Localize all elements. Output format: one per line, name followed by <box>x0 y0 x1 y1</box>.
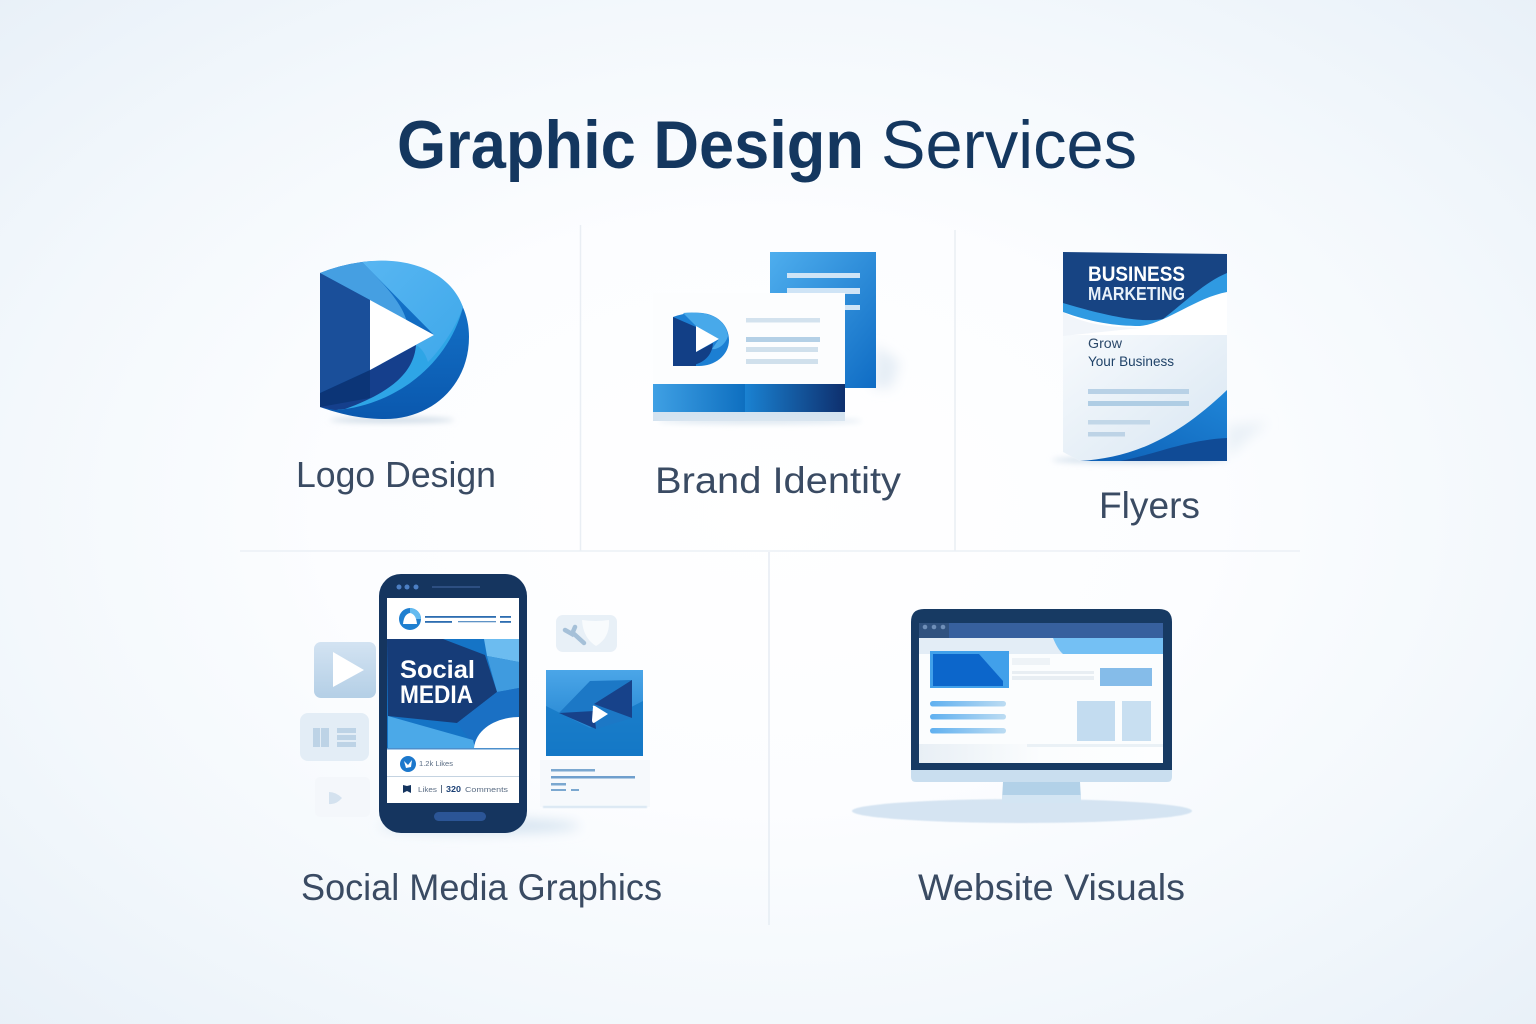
icon: video thumbnail <box>546 670 643 756</box>
comments row: Likes <box>418 785 437 794</box>
icon: smartphone <box>379 574 527 833</box>
title <box>397 107 1137 183</box>
label: website visuals: Website Visuals <box>918 867 1185 908</box>
panel: flyers <box>1052 252 1268 526</box>
label: flyers: Flyers <box>1099 485 1200 526</box>
comments row <box>403 784 508 794</box>
icon: text card <box>540 760 650 808</box>
hero image <box>930 651 1009 688</box>
icon: business card <box>653 293 862 424</box>
comments row: Comments <box>465 785 508 794</box>
label: social media graphics: Social Media Graphics <box>301 867 662 908</box>
icon: flyer: Your Business <box>1088 353 1174 369</box>
title: Graphic Design <box>397 107 864 183</box>
panel: website visuals <box>852 609 1192 908</box>
icon: small logo <box>673 312 729 366</box>
icon: faded play tile <box>315 777 370 817</box>
icon: floating play tile <box>314 642 376 698</box>
post header <box>399 608 511 630</box>
title: Services <box>881 107 1137 183</box>
post image: MEDIA <box>400 681 473 709</box>
post image <box>387 639 519 748</box>
panel: logo design <box>296 261 496 495</box>
panel: social media graphics <box>300 574 662 908</box>
icon: floating layout tile <box>300 713 369 761</box>
flyer headline: BUSINESS <box>1088 263 1185 286</box>
likes row: 1.2k Likes <box>419 759 453 768</box>
icon: flyer: MARKETING <box>1088 284 1185 304</box>
icon: floating wrench and shield tile <box>556 615 617 652</box>
flyer subheading: Grow <box>1088 335 1123 351</box>
icon: desktop monitor <box>852 609 1192 823</box>
panel: brand identity <box>653 252 902 501</box>
comments row: 320 <box>446 784 461 794</box>
post headline: Social <box>400 656 475 684</box>
label: brand identity: Brand Identity <box>655 460 902 501</box>
icon: letterhead sheet <box>770 252 900 388</box>
icon: D play logo <box>320 261 469 423</box>
icon: flyer <box>1052 252 1268 464</box>
label: logo design: Logo Design <box>296 454 496 495</box>
likes row <box>400 756 453 772</box>
